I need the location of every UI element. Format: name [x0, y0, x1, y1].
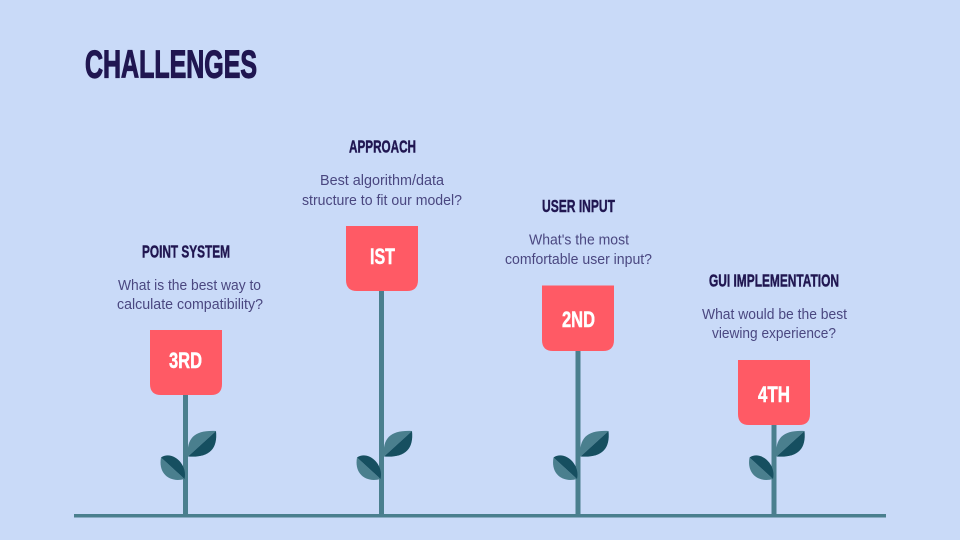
panel: approach: [302, 136, 462, 516]
icon: right leaf: [580, 431, 609, 457]
text: point system description: calculate compatibility?: [117, 297, 263, 313]
text: user input description: [505, 232, 652, 268]
flower head: rank badge: [150, 330, 222, 395]
rank label: 2ND: [562, 307, 595, 332]
icon: left leaf: [749, 455, 773, 480]
text: approach description: [302, 173, 462, 209]
text: user input description: comfortable user input?: [505, 252, 652, 268]
heading: approach: APPROACH: [349, 136, 416, 156]
rank label: IST: [370, 244, 395, 269]
text: gui implementation description: viewing experience?: [712, 326, 836, 342]
rank label: 4TH: [758, 382, 790, 407]
flower stem: [183, 390, 188, 516]
flower stem: [772, 420, 776, 516]
flower head: rank badge: [542, 286, 614, 351]
icon: right leaf: [188, 431, 216, 457]
flower head: rank badge: [738, 360, 810, 425]
icon: left leaf: [357, 455, 381, 480]
rank label: 3RD: [169, 348, 202, 373]
flower head: rank badge: [346, 226, 418, 291]
icon: left leaf: [161, 455, 185, 480]
flower stem: [576, 346, 580, 516]
icon: right leaf: [776, 431, 805, 457]
baseline ground line: [74, 514, 886, 518]
heading: user input: USER INPUT: [542, 196, 615, 216]
text: approach description: Best algorithm/data: [320, 173, 445, 189]
text: gui implementation description: What would be the best: [702, 307, 847, 323]
icon: left leaf: [553, 455, 577, 480]
panel: user input: [505, 196, 652, 516]
panel: gui implementation: [702, 270, 847, 516]
text: point system description: [117, 278, 263, 313]
text: point system description: What is the best way to: [118, 278, 261, 294]
heading: gui implementation: GUI IMPLEMENTATION: [709, 270, 839, 290]
text: approach description: structure to fit our model?: [302, 193, 462, 209]
flower stem: [379, 286, 384, 516]
heading: point system: POINT SYSTEM: [142, 242, 230, 262]
title: CHALLENGES: [85, 44, 257, 86]
icon: right leaf: [384, 431, 412, 457]
panel: point system: [117, 242, 263, 516]
text: gui implementation description: [702, 307, 847, 342]
text: user input description: What's the most: [529, 232, 629, 248]
